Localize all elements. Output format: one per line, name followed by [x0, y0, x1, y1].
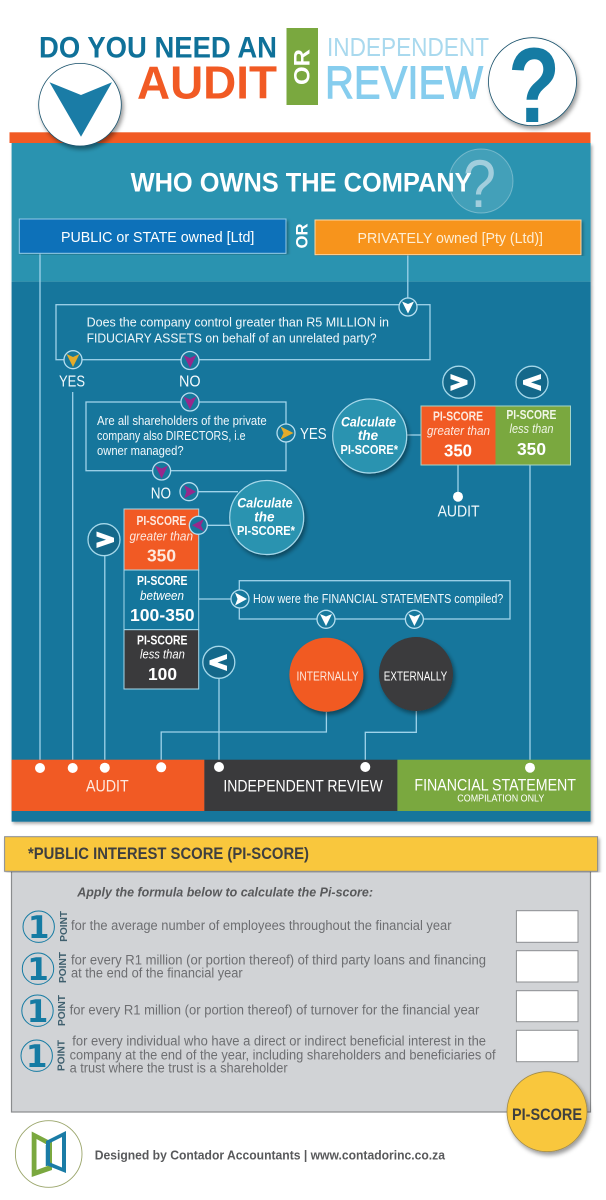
row 2: POINT: [57, 951, 69, 983]
row 4: 1: [26, 1039, 47, 1075]
logo: contador: [15, 1121, 82, 1187]
row 3: 1: [27, 994, 48, 1030]
score box: greater than 350: PI-SCORE: [433, 409, 483, 424]
title: REVIEW: [325, 56, 484, 108]
title: AUDIT: [137, 56, 277, 108]
row 3: [22, 991, 578, 1030]
callout: calculate the pi-score left: the: [254, 510, 275, 525]
icon: white down arrow: [399, 298, 417, 316]
box: privately owned: [315, 220, 581, 255]
score box: less than 350: [421, 406, 570, 465]
score box: less than 350: PI-SCORE: [506, 407, 557, 422]
row 1: POINT: [58, 910, 70, 942]
icon: question mark circle: ?: [508, 25, 560, 145]
circle: externally: [379, 637, 453, 711]
row 1: [23, 910, 578, 946]
score box: greater than 350: [421, 406, 496, 465]
question box: shareholders directors: Are all shareholders of the private: [97, 414, 267, 428]
row 4: for every individual who have a direct or indirect beneficial interest in the: [72, 1034, 486, 1049]
question box: fiduciary assets: FIDUCIARY ASSETS on behalf of an unrelated party?: [87, 331, 377, 346]
row 3: for every R1 million (or portion thereof) of turnover for the financial year: [70, 1002, 480, 1017]
label: yes: YES: [59, 374, 85, 391]
callout: calculate the pi-score left: PI-SCORE*: [237, 523, 296, 538]
row 4: [21, 1030, 578, 1076]
badge: pi-score: [507, 1072, 587, 1152]
icon: purple right arrow: [180, 483, 198, 501]
badge: pi-score: PI-SCORE: [512, 1105, 582, 1124]
score box: greater than 350: greater than: [427, 423, 490, 438]
icon: greater than: [443, 366, 475, 398]
icon: purple arrow bottom: [153, 462, 171, 480]
panel: pi-score formula: [5, 837, 598, 1112]
icon: purple left arrow: [189, 516, 207, 534]
connector lines: [40, 253, 530, 768]
row 2: 1: [27, 952, 49, 988]
row 2: [22, 951, 578, 988]
score: greater than 350: [124, 509, 199, 570]
icon: white down arrow internal: [317, 610, 335, 628]
dot and label: audit: AUDIT: [438, 504, 480, 521]
score: less than 100: 100: [148, 664, 177, 684]
box: privately owned: PRIVATELY owned [Pty (Ltd)]: [358, 230, 543, 247]
title: [39, 32, 489, 108]
score: less than 100: less than: [140, 647, 185, 662]
label: no to calculate: NO: [151, 485, 171, 502]
outcome bar: audit: AUDIT: [86, 776, 129, 795]
score box: less than 350: 350: [517, 439, 546, 459]
callout: calculate the pi-score right: the: [358, 428, 379, 443]
score stack: [124, 509, 199, 689]
score: greater than 350: greater than: [130, 529, 193, 544]
row 3: POINT: [56, 994, 68, 1026]
flow end dots: [35, 762, 535, 773]
score box: less than 350: less than: [510, 421, 554, 436]
row 2: at the end of the financial year: [71, 966, 243, 981]
label: yes to calculate: YES: [300, 426, 327, 443]
question box: shareholders directors: [86, 402, 286, 471]
outcome bar: audit: [12, 760, 204, 811]
box: public or state owned: PUBLIC or STATE owned [Ltd]: [61, 229, 254, 246]
question box: financial statements: [239, 581, 510, 619]
score box: greater than 350: 350: [444, 441, 472, 461]
OR badge: [286, 28, 318, 105]
yellow heading: [5, 837, 598, 871]
title: DO YOU NEED AN: [39, 32, 277, 64]
icon: yellow arrow: [64, 351, 82, 369]
row 1: 1: [28, 910, 49, 946]
row 2: for every R1 million (or portion thereof) of third party loans and financing: [71, 952, 486, 967]
heading: who owns the company: WHO OWNS THE COMPANY: [131, 168, 472, 198]
footer credit: Designed by Contador Accountants | www.contadorinc.co.za: [95, 1147, 446, 1162]
circle: internally: [289, 638, 363, 712]
score: greater than 350: 350: [147, 546, 176, 566]
outcome bar: financial statement: FINANCIAL STATEMENT: [414, 776, 576, 795]
score: less than 100: [124, 630, 199, 689]
question box: fiduciary assets: Does the company control greater than R5 MILLION in: [87, 315, 389, 330]
orange header bar: [10, 132, 590, 143]
heading: who owns the company: [131, 146, 513, 222]
label: OR: OR: [292, 224, 312, 248]
score: greater than 350: PI-SCORE: [136, 513, 187, 528]
question box: fiduciary assets: [56, 305, 430, 360]
OR badge: OR: [290, 49, 314, 85]
panel: flowchart background: [12, 143, 591, 822]
outcome bar: independent review: INDEPENDENT REVIEW: [223, 776, 383, 795]
row 1: for the average number of employees throughout the financial year: [71, 918, 452, 933]
icon: down arrow circle: [39, 63, 121, 146]
circle: internally: INTERNALLY: [296, 670, 359, 684]
outcome bar: independent review: [204, 760, 397, 811]
icon: less than left: [203, 646, 235, 678]
question box: shareholders directors: owner managed?: [97, 444, 184, 458]
icon: greater than left: [88, 524, 120, 556]
row 4: company at the end of the year, including shareholders and beneficiaries of: [70, 1047, 496, 1062]
question box: financial statements: How were the FINANCIAL STATEMENTS compiled?: [253, 592, 503, 606]
box: public or state owned: [19, 219, 286, 253]
callout: calculate the pi-score left: Calculate: [237, 496, 293, 511]
dot and label: audit: [438, 492, 480, 521]
icon: white right arrow: [231, 590, 249, 608]
icon: white down arrow external: [405, 610, 423, 628]
callout: calculate the pi-score right: Calculate: [341, 415, 396, 430]
row 4: a trust where the trust is a shareholder: [70, 1061, 288, 1076]
circle: externally: EXTERNALLY: [384, 670, 448, 684]
icon: purple arrow no: [181, 352, 199, 370]
callout: calculate the pi-score left: [230, 480, 304, 554]
callout: calculate the pi-score right: [333, 399, 407, 473]
score: between 100-350: 100-350: [130, 605, 195, 625]
yellow heading: *PUBLIC INTEREST SCORE (PI-SCORE): [28, 844, 309, 863]
outcome bar: financial statement: COMPILATION ONLY: [457, 793, 544, 805]
score: less than 100: PI-SCORE: [137, 632, 188, 647]
title: INDEPENDENT: [327, 32, 489, 62]
heading: who owns the company: ?: [463, 146, 496, 222]
row 4: POINT: [55, 1039, 67, 1071]
label: no: NO: [179, 374, 201, 391]
score: between 100-350: between: [140, 588, 184, 603]
question box: shareholders directors: company also DIRECTORS, i.e: [97, 429, 246, 443]
outcome bar: financial statement: [397, 760, 591, 811]
icon: purple arrow top: [181, 393, 199, 411]
icon: yellow right arrow: [277, 424, 295, 442]
score: between 100-350: [124, 570, 199, 630]
icon: less than: [516, 366, 548, 398]
formula intro: Apply the formula below to calculate the Pi-score:: [76, 885, 373, 900]
score: between 100-350: PI-SCORE: [137, 573, 188, 588]
callout: calculate the pi-score right: PI-SCORE*: [340, 442, 399, 457]
